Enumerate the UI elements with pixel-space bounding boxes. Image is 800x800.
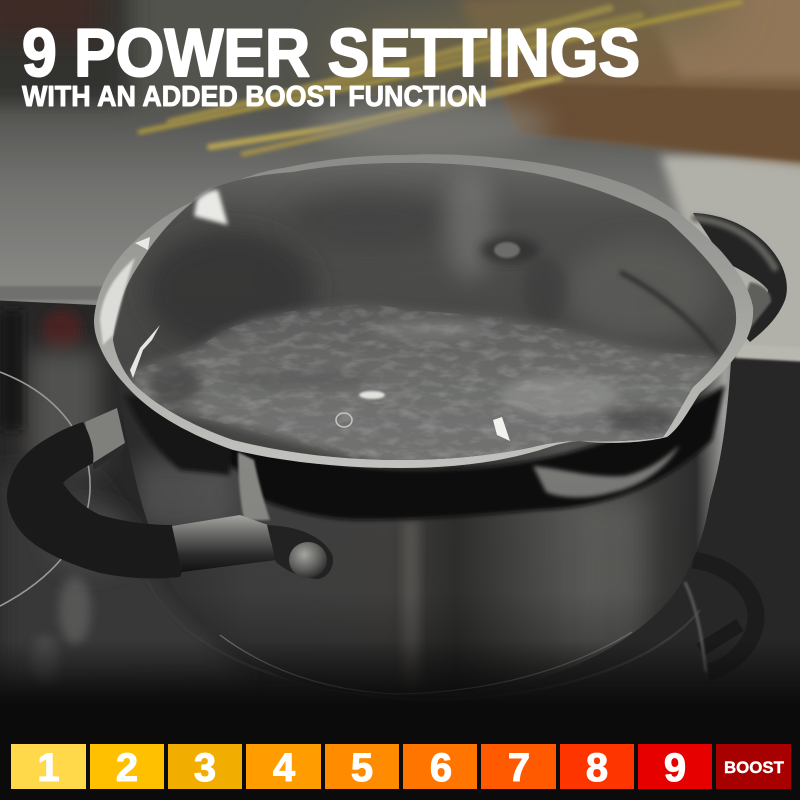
- cooktop surface: [0, 300, 800, 720]
- level 7: [481, 744, 556, 790]
- upper bracket: [85, 408, 125, 463]
- bright patch below the spout: [533, 445, 680, 497]
- bottom dark fade behind the scale: [0, 640, 800, 705]
- level 9: [638, 744, 712, 790]
- interior wall: [113, 162, 736, 460]
- base glint line: [220, 632, 632, 694]
- water surface: [130, 305, 717, 470]
- boost level: BOOST: [724, 758, 785, 777]
- level 4: 4: [273, 746, 296, 790]
- title: 9 POWER SETTINGS: [22, 15, 640, 91]
- blurred spaghetti on the cutting board: [140, 0, 740, 154]
- level 9: 9: [664, 746, 686, 790]
- level 1: 1: [37, 746, 60, 790]
- pot body: [127, 362, 731, 694]
- level 6: 6: [430, 746, 452, 790]
- boost level: [716, 744, 791, 789]
- level 3: 3: [194, 746, 216, 790]
- dark reflection band below the rim: [175, 385, 725, 520]
- brushed-steel highlights: [578, 498, 649, 656]
- steam haze behind the pot: [310, 97, 550, 153]
- counter top: [0, 110, 800, 370]
- level 4: [246, 744, 321, 790]
- knob socket: [267, 525, 333, 579]
- rim glare: [194, 190, 228, 225]
- metal rivet plate: [238, 452, 270, 520]
- level 2: 2: [116, 746, 138, 790]
- water texture: [130, 305, 706, 460]
- level 7: 7: [508, 746, 530, 790]
- pot handle: right: [693, 213, 787, 342]
- pot handle: left: [7, 408, 333, 579]
- pot rim and interior: [90, 150, 760, 475]
- level 8: [560, 744, 634, 790]
- level 6: [403, 744, 477, 790]
- level 1: [11, 744, 86, 790]
- cooktop burner ring: [0, 372, 700, 700]
- rubber grip: [7, 422, 182, 578]
- interior dark seam and rivet: [480, 237, 540, 263]
- level 5: 5: [351, 746, 373, 790]
- level 3: [168, 744, 242, 790]
- level 8: 8: [586, 746, 608, 790]
- level 2: [90, 744, 164, 790]
- cutting board: [460, 0, 800, 165]
- power scale bar: [11, 744, 791, 790]
- metal arm: [172, 515, 287, 572]
- knob: [289, 542, 327, 578]
- water glints: [130, 325, 160, 378]
- subtitle: WITH AN ADDED BOOST FUNCTION: [22, 81, 487, 113]
- rim lip: [94, 154, 753, 468]
- level 5: [325, 744, 399, 790]
- lower right handle behind the pot: [685, 560, 756, 672]
